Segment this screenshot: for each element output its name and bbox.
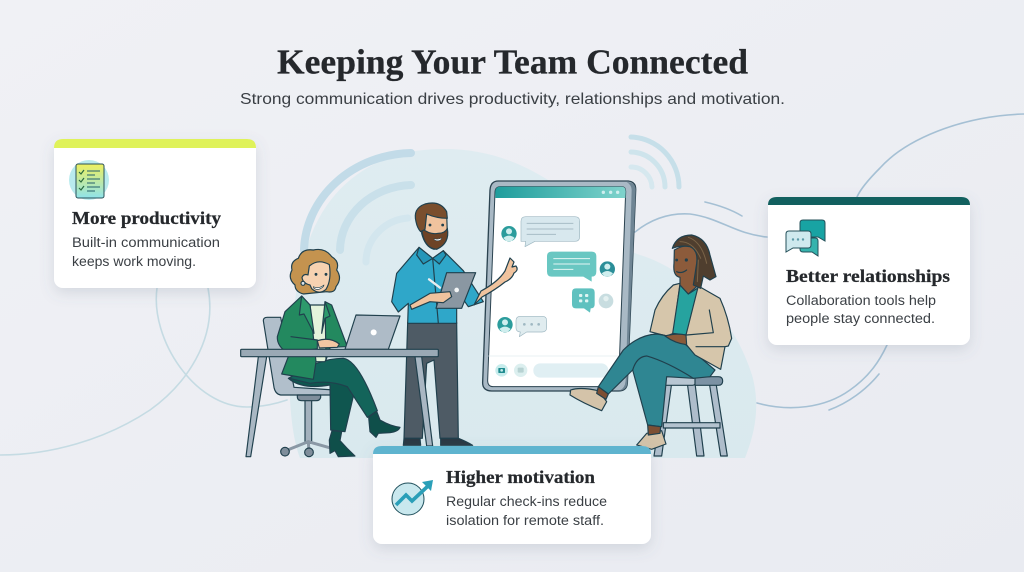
heading: Higher motivation <box>446 467 595 487</box>
man's pointing hand <box>474 258 517 305</box>
description: Built-in communication <box>72 235 220 250</box>
illustration: phone screen <box>483 181 636 391</box>
subtitle: Strong communication drives productivity, relationships and motivation. <box>240 91 785 108</box>
signal arcs left <box>304 153 411 262</box>
hands <box>317 339 339 348</box>
woman trousers and shoes <box>288 358 400 457</box>
signal arcs right <box>631 137 679 187</box>
illustration: standing man <box>392 203 483 445</box>
description: Collaboration tools help <box>786 293 936 308</box>
neck and head <box>422 209 447 249</box>
background blob <box>289 149 756 458</box>
legs <box>598 334 715 427</box>
illustration: seated person <box>570 235 732 456</box>
jacket <box>277 296 316 379</box>
shirt <box>673 285 700 335</box>
icon: checklist <box>69 160 109 200</box>
card: more productivity <box>54 139 256 288</box>
title: Keeping Your Team Connected <box>277 42 749 82</box>
description: keeps work moving. <box>72 254 196 269</box>
chair <box>263 317 334 457</box>
icon: chat bubbles <box>786 220 825 256</box>
hair <box>290 249 340 294</box>
heading: More productivity <box>72 208 221 228</box>
hand <box>665 334 687 345</box>
desk <box>246 357 267 457</box>
ankles <box>597 387 661 435</box>
shoes <box>570 388 607 411</box>
card: higher motivation <box>373 446 651 544</box>
description: isolation for remote staff. <box>446 513 604 528</box>
stool <box>654 377 727 456</box>
cardigan left panel <box>650 283 680 336</box>
card: better relationships <box>768 197 970 345</box>
locs <box>672 235 716 288</box>
description: people stay connected. <box>786 311 935 326</box>
shirt <box>392 247 483 323</box>
blouse <box>310 305 330 362</box>
legs <box>404 323 458 438</box>
head <box>674 246 702 294</box>
icon: growth arrow <box>392 480 433 515</box>
illustration: woman at desk <box>241 249 438 457</box>
face <box>302 262 330 292</box>
heading: Better relationships <box>786 266 950 286</box>
forearm and tablet <box>436 273 476 308</box>
background connection lines <box>0 114 1024 455</box>
cardigan right panel <box>686 286 732 369</box>
laptop <box>345 315 400 349</box>
description: Regular check-ins reduce <box>446 494 607 509</box>
